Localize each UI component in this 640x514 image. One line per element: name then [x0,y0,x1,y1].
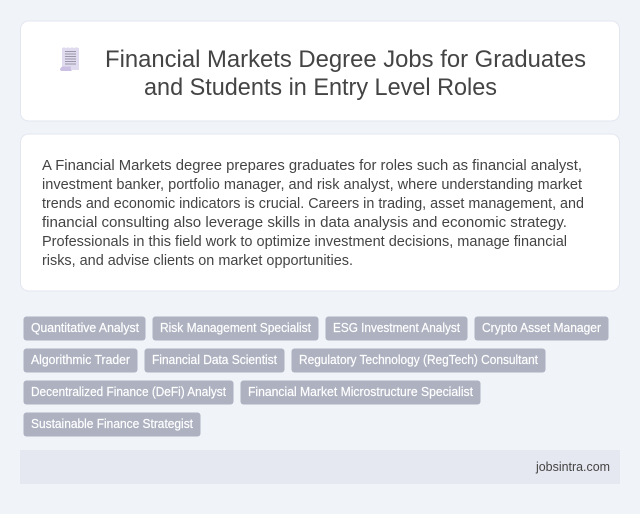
icon: document [60,47,79,71]
title: and Students in Entry Level Roles [144,74,497,101]
tag: Decentralized Finance (DeFi) Analyst [24,380,234,404]
tag: ESG Investment Analyst [326,316,468,340]
tag: Financial Market Microstructure Specialist [240,380,480,404]
panel: description [20,134,620,291]
tag: Risk Management Specialist: Risk Management Specialist [160,321,311,335]
tag: Crypto Asset Manager [474,316,608,340]
title: Financial Markets Degree Jobs for Graduates [105,46,586,73]
tag: Algorithmic Trader: Algorithmic Trader [31,353,130,367]
panel: title card [20,21,620,121]
tag: Financial Data Scientist [144,348,284,372]
tag: Sustainable Finance Strategist [24,412,200,436]
tag: Financial Market Microstructure Specialist: Financial Market Microstructure Specialist [248,385,474,399]
tag: ESG Investment Analyst: ESG Investment Analyst [333,321,460,335]
tag: Quantitative Analyst: Quantitative Analyst [31,321,140,335]
tag: Financial Data Scientist: Financial Data Scientist [152,353,277,367]
tag: Algorithmic Trader [24,348,138,372]
tag: Regulatory Technology (RegTech) Consultant: Regulatory Technology (RegTech) Consultant [299,353,538,367]
footer: site name: jobsintra.com [535,460,610,474]
tag: Sustainable Finance Strategist: Sustainable Finance Strategist [31,417,194,431]
tag: Risk Management Specialist [152,316,318,340]
text block: description [42,158,584,269]
tag: Quantitative Analyst [24,316,146,340]
text block: description: risks, and advise clients on market opportunities. [42,253,353,269]
job tags [24,316,608,436]
tag: Decentralized Finance (DeFi) Analyst: Decentralized Finance (DeFi) Analyst [31,385,226,399]
tag: Regulatory Technology (RegTech) Consultant [292,348,546,372]
text block: description: trends and economic indicators is crucial. Careers in trading, asset management, and [42,196,584,212]
text block: description: investment banker, portfolio manager, and risk analyst, where understanding market [42,177,582,193]
text block: description: A Financial Markets degree prepares graduates for roles such as financial analyst, [42,158,582,174]
text block: description: financial consulting also leverage skills in data analysis and economic strategy. [42,215,567,231]
text block: description: Professionals in this field work to optimize investment decisions, manage financial [42,234,567,250]
tag: Crypto Asset Manager: Crypto Asset Manager [482,321,601,335]
title [105,46,586,101]
footer [20,450,620,484]
